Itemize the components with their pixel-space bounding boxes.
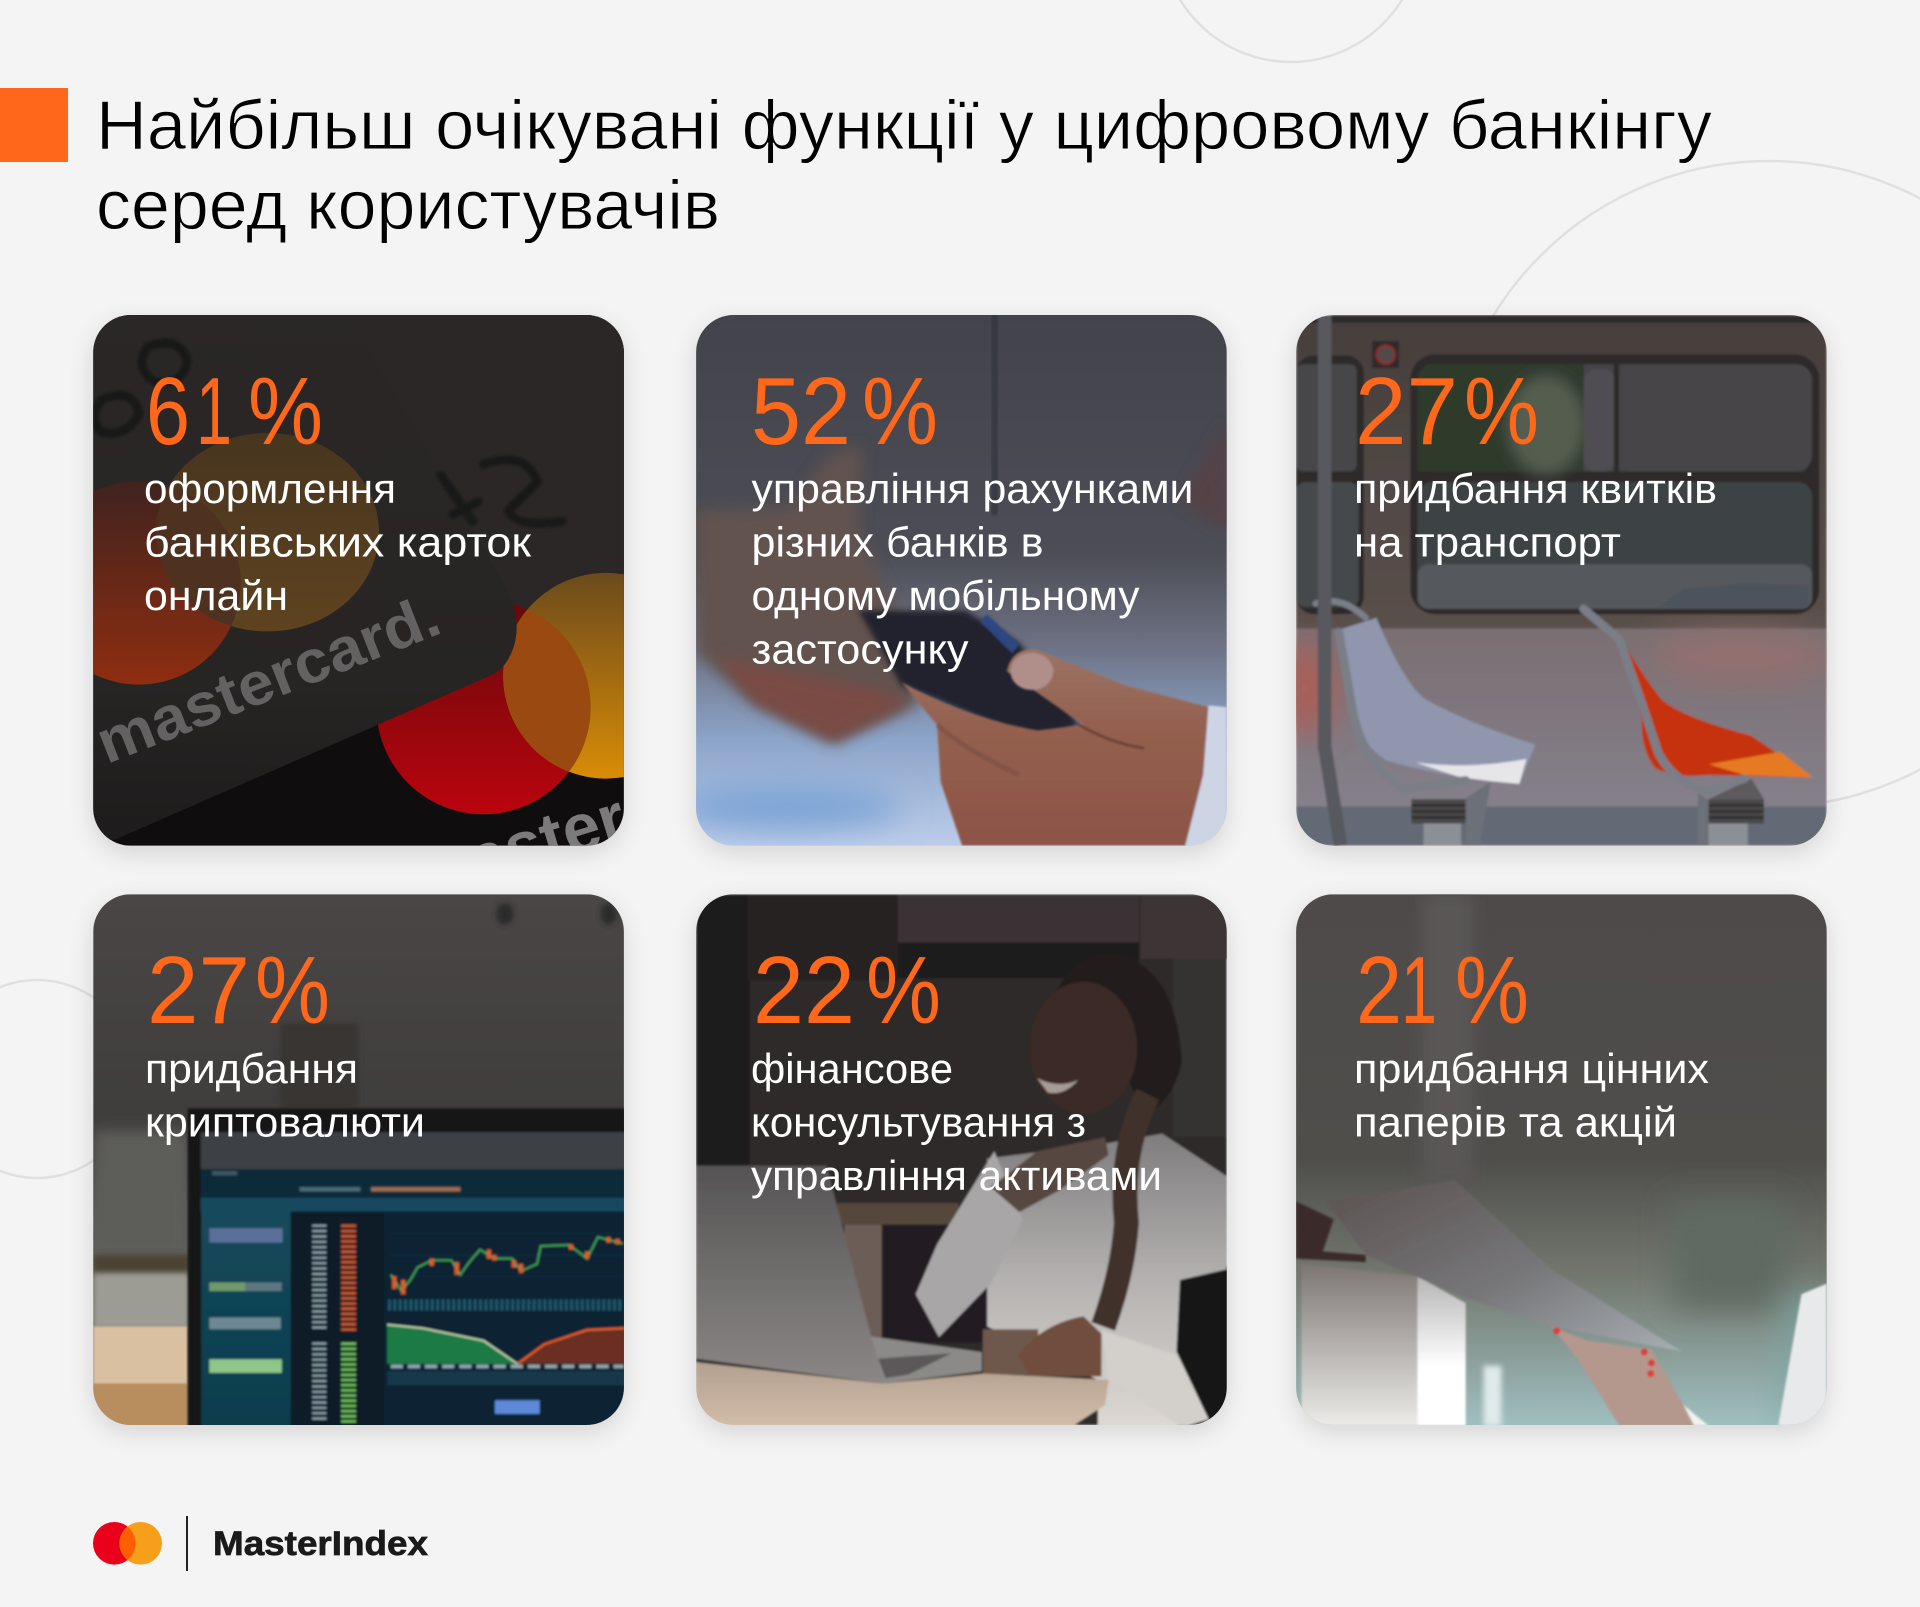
percentage: 52%: 52 (751, 358, 851, 465)
panel: 21% securities (1296, 894, 1830, 1432)
percentage: 21% (1356, 937, 1529, 1044)
description: card issuance: банківських карток (144, 518, 532, 566)
description: card issuance: онлайн (144, 572, 288, 619)
percentage: 22% (753, 937, 941, 1044)
description: card issuance (144, 465, 532, 619)
decorative circle: top (1161, 0, 1421, 62)
percentage: 61% (146, 358, 323, 465)
photo: transit seats (1273, 315, 1834, 846)
percentage: 27% crypto: % (255, 937, 330, 1044)
description: cryptocurrency (145, 1045, 425, 1146)
description: cryptocurrency: криптовалюти (145, 1098, 425, 1146)
percentage: 27% crypto: 27 (147, 937, 250, 1044)
photo: hand holding paper (1296, 894, 1830, 1426)
percentage: 61%: % (248, 358, 323, 465)
description: financial advice: фінансове (751, 1045, 953, 1092)
title: Найбільш очікувані функції у цифровому банкінгу (96, 86, 1712, 164)
title (96, 86, 1712, 244)
percentage: 52%: % (862, 358, 938, 465)
description: multi-bank accounts: застосунку (752, 626, 968, 672)
description: multi-bank accounts (752, 465, 1194, 672)
percentage: 52% (751, 358, 938, 465)
photo: woman with laptop (696, 894, 1228, 1426)
description: financial advice (751, 1045, 1162, 1199)
description: financial advice: консультування з (751, 1098, 1086, 1146)
logo: mastercard circles (93, 1522, 162, 1565)
percentage: 21%: 1 (1401, 937, 1437, 1044)
description: securities: паперів та акцій (1354, 1098, 1677, 1146)
percentage: 21%: 2 (1356, 937, 1402, 1044)
panel: 22% financial advice (696, 894, 1228, 1432)
percentage: 21%: % (1455, 937, 1529, 1044)
photo: hands with phone (673, 315, 1227, 846)
description: multi-bank accounts: одному мобільному (752, 572, 1140, 619)
logo text: MasterIndex: MasterIndex (213, 1525, 428, 1563)
description: transport tickets: придбання квитків (1354, 465, 1717, 512)
description: card issuance: оформлення (144, 465, 396, 512)
panel: 27% cryptocurrency (93, 894, 627, 1432)
percentage: 27%: % (1464, 358, 1539, 465)
percentage: 27% crypto (147, 937, 330, 1044)
percentage: 61%: 1 (196, 358, 232, 465)
description: transport tickets: на транспорт (1354, 518, 1621, 566)
description: transport tickets (1354, 465, 1717, 566)
decorative circle: left (0, 980, 136, 1178)
icon: orange title square (0, 88, 68, 162)
percentage: 61%: 6 (146, 358, 190, 465)
title: серед користувачів (96, 166, 720, 244)
description: cryptocurrency: придбання (145, 1045, 358, 1092)
panel: 52% multi-bank accounts (673, 315, 1227, 853)
percentage: 27%: 27 (1355, 358, 1458, 465)
percentage: 27% (1355, 358, 1539, 465)
description: multi-bank accounts: управління рахунками (752, 465, 1194, 512)
panel: 61% card issuance (85, 315, 631, 861)
description: financial advice: управління активами (751, 1152, 1162, 1199)
photo: mastercard cards: mastercard. (87, 581, 449, 776)
photo: mastercard cards: mastercard (402, 738, 770, 916)
logo divider (186, 1516, 188, 1571)
description: securities (1354, 1045, 1709, 1146)
percentage: 22%: % (866, 937, 941, 1044)
photo: trading screen (93, 894, 627, 1430)
description: multi-bank accounts: різних банків в (752, 518, 1044, 566)
photo: mastercard cards (93, 315, 624, 846)
percentage: 22%: 22 (753, 937, 855, 1044)
panel: 27% transport tickets (1273, 315, 1834, 853)
decorative circle: right (1446, 161, 1920, 807)
description: securities: придбання цінних (1354, 1045, 1709, 1092)
